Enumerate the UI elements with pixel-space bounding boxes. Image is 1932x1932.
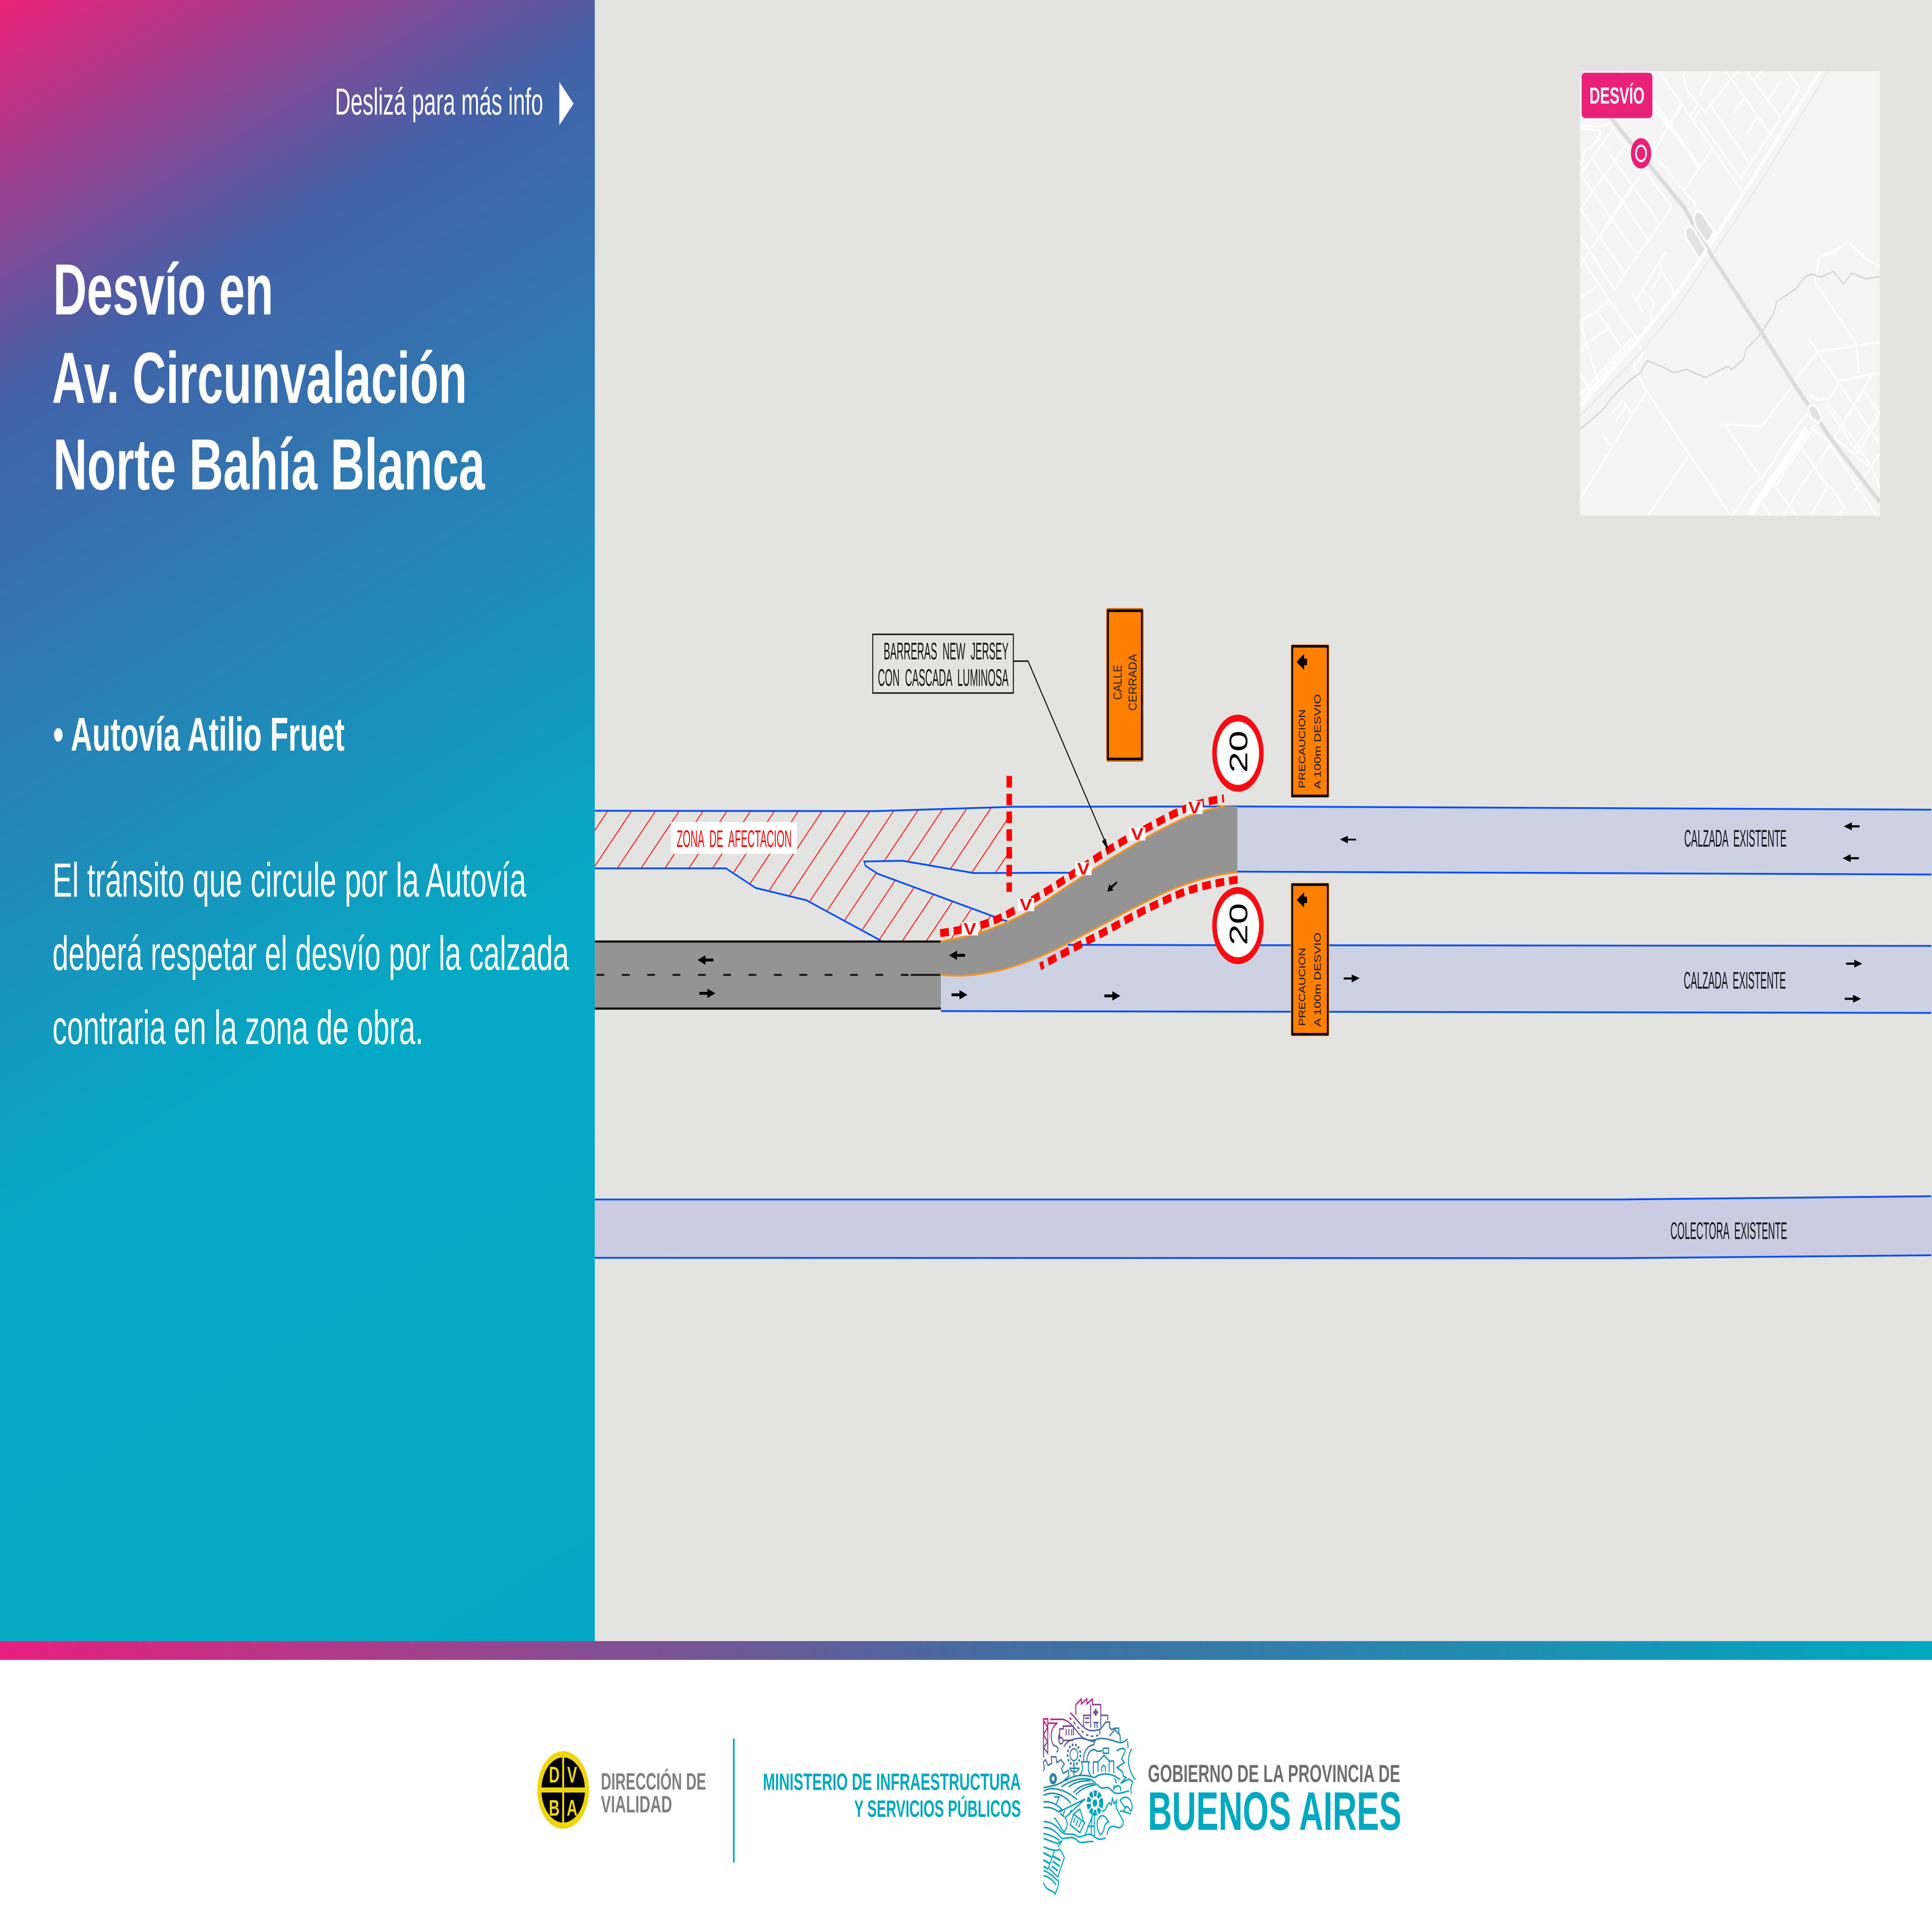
body text: El tránsito que circule por la Autovía [53,854,526,907]
road: colectora existente: COLECTORA EXISTENTE [1670,1218,1787,1245]
title [52,249,485,505]
road: upper calzada existente [1013,806,1932,874]
sign: speed limit 20 lower: 20 [1225,903,1253,945]
sign: precaución upper [1291,645,1329,798]
logo: DVBA badge: B [549,1796,560,1821]
barrier: upper red dashes [940,798,1224,933]
sign: calle cerrada: CERRADA [1126,654,1139,711]
road: detour curve [940,806,1237,976]
subtitle: • Autovía Atilio Fruet [53,708,345,761]
footer [0,1660,1932,1932]
map: main highway [1580,73,1880,502]
road diagram [492,609,1932,1258]
hatched zone: zona de afectación [595,806,1070,940]
body text: deberá respetar el desvío por la calzada [53,927,569,980]
map marker [1631,138,1651,168]
sign: calle cerrada: CALLE [1111,665,1124,700]
barrier: lower red dashes [1040,879,1238,966]
V signs on barrier [962,798,1202,938]
map: interchanges [1685,212,1822,423]
V signs on barrier: V [1020,895,1032,914]
body text [53,854,569,1054]
text: dirección de vialidad [601,1768,706,1818]
road: lower calzada existente [941,938,1932,1013]
logo: provincia illustration [1044,1699,1136,1894]
road: colectora existente [595,1196,1932,1258]
hatched zone: zona de afectación: ZONA DE AFECTACION [677,826,792,852]
V signs on barrier: V [1131,825,1144,844]
logo: DVBA badge: V [567,1762,577,1787]
map label: desvío [1582,73,1652,118]
road: grey existing section [595,942,941,1009]
title: Av. Circunvalación [52,337,467,418]
callout: barreras new jersey: CON CASCADA LUMINOSA [878,664,1009,691]
map: thin rail line [1580,71,1828,417]
callout: barreras new jersey: BARRERAS NEW JERSEY [884,638,1009,665]
gradient divider bar [0,1641,1932,1660]
footer divider [733,1738,735,1862]
body text: contraria en la zona de obra. [53,1001,423,1054]
text: ministerio: Y SERVICIOS PÚBLICOS [854,1796,1021,1822]
text: ministerio: MINISTERIO DE INFRAESTRUCTURA [763,1769,1021,1795]
V signs on barrier: V [1077,859,1090,878]
text: buenos aires: BUENOS AIRES [1148,1781,1401,1842]
panel: locator map [1580,71,1880,516]
sign: precaución lower: PRECAUCION [1298,948,1308,1026]
title: Desvío en [53,249,273,330]
sign: precaución lower: A 100m DESVIO [1313,932,1323,1027]
sign: calle cerrada [1107,609,1143,761]
map: stream [1580,271,1880,429]
traffic arrows [697,822,1862,1003]
swipe hint text: Deslizá para más info [335,80,543,122]
panel: left gradient panel [0,0,595,1641]
sign: speed limit 20 upper [1214,718,1261,788]
V signs on barrier: V [964,920,976,938]
text: ministerio [763,1769,1021,1822]
road: upper calzada existente: CALZADA EXISTENTE [1684,825,1787,852]
sign: precaución lower [1291,883,1329,1036]
text: dirección de vialidad: DIRECCIÓN DE [601,1768,706,1794]
road: lower calzada existente: CALZADA EXISTENTE [1684,967,1786,994]
text: dirección de vialidad: VIALIDAD [601,1791,672,1818]
map: thick avenues [1580,71,1821,515]
V signs on barrier: V [1188,798,1201,817]
sign: precaución upper: PRECAUCION [1298,709,1308,788]
logo: DVBA badge: D [549,1762,560,1787]
map label: desvío: DESVÍO [1590,83,1645,109]
logo: DVBA badge [537,1751,589,1829]
sign: speed limit 20 upper: 20 [1225,731,1253,773]
icon: swipe arrow [560,82,573,125]
title: Norte Bahía Blanca [53,424,485,505]
text: gobierno de la provincia: GOBIERNO DE LA PROVINCIA DE [1148,1760,1400,1787]
callout: barreras new jersey [873,634,1109,852]
barrier: vertical red dashes [1005,776,1014,892]
logo: DVBA badge: A [567,1796,578,1821]
sign: precaución upper: A 100m DESVIO [1313,694,1323,789]
sign: speed limit 20 lower [1214,891,1261,961]
map: streets [1580,71,1880,515]
